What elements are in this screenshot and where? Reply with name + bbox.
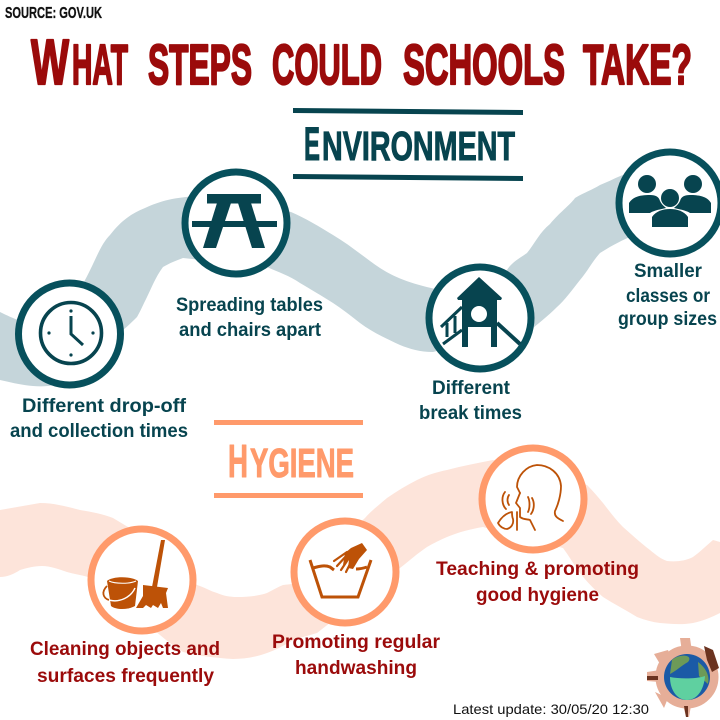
label: break times: Different xyxy=(432,377,510,399)
label: teaching hygiene: Teaching & promoting xyxy=(436,558,639,580)
icon: picnic table xyxy=(192,194,277,248)
label: class sizes xyxy=(618,260,717,330)
step: handwashing xyxy=(294,521,396,623)
title: STEPS xyxy=(148,33,252,97)
icon: person coughing xyxy=(498,465,563,530)
step: teaching hygiene xyxy=(482,448,584,550)
label: break times xyxy=(419,377,522,424)
label: teaching hygiene: good hygiene xyxy=(476,584,599,606)
title: COULD xyxy=(272,33,382,97)
label: cleaning xyxy=(30,638,220,687)
label: break times: break times xyxy=(419,402,522,424)
label: class sizes: classes or xyxy=(626,285,710,307)
icon: hand in basin xyxy=(310,543,371,597)
title xyxy=(31,26,692,98)
step: break times xyxy=(429,267,531,369)
source label: SOURCE: GOV.UK xyxy=(5,5,103,22)
label: teaching hygiene xyxy=(436,558,639,606)
label: tables: Spreading tables xyxy=(176,294,323,316)
step: clock xyxy=(18,283,120,385)
icon: playground xyxy=(441,277,520,347)
title: SCHOOLS xyxy=(403,33,565,97)
hygiene heading: H xyxy=(228,435,248,487)
label: class sizes: Smaller xyxy=(634,260,702,282)
hygiene heading xyxy=(214,420,363,498)
logo: globe with mask and hands xyxy=(647,638,719,717)
label: handwashing: Promoting regular xyxy=(272,631,440,653)
label: handwashing: handwashing xyxy=(295,657,417,679)
icon: bucket and mop xyxy=(103,540,168,609)
title: W xyxy=(31,26,69,98)
update timestamp: Latest update: 30/05/20 12:30 xyxy=(453,701,649,717)
environment heading xyxy=(293,108,523,181)
label: cleaning: Cleaning objects and xyxy=(30,638,220,660)
icon: clock xyxy=(40,302,102,364)
hygiene ribbon xyxy=(0,460,720,659)
label: drop-off times xyxy=(10,395,188,442)
hygiene heading: YGIENE xyxy=(250,440,354,486)
label: drop-off times: and collection times xyxy=(10,420,188,442)
label: drop-off times: Different drop-off xyxy=(22,395,187,417)
label: tables xyxy=(176,294,323,341)
icon: group of people xyxy=(629,175,711,227)
step: cleaning xyxy=(91,529,193,631)
environment heading: NVIRONMENT xyxy=(322,123,515,169)
label: tables: and chairs apart xyxy=(179,319,321,341)
label: handwashing xyxy=(272,631,440,679)
environment ribbon xyxy=(0,174,650,386)
step: class sizes xyxy=(619,152,720,254)
step: tables xyxy=(185,172,287,274)
title: HAT xyxy=(72,33,128,97)
label: cleaning: surfaces frequently xyxy=(37,665,214,687)
environment heading: E xyxy=(304,117,320,170)
